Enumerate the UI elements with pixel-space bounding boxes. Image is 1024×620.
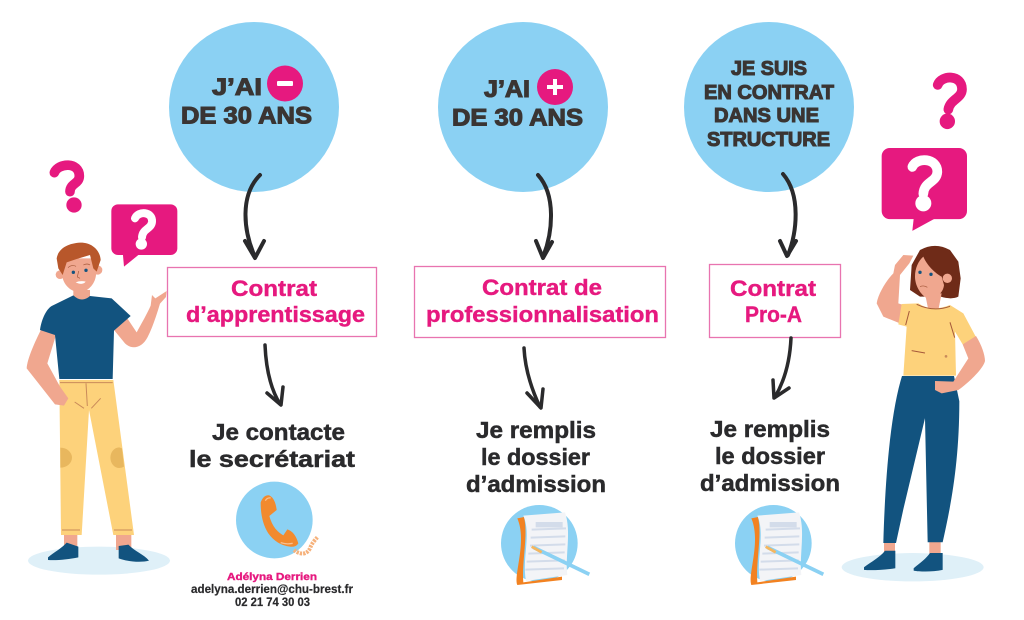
text: je contacte le secrétariat: Je contacte — [212, 419, 345, 445]
panel: circle under 30: J’AI — [212, 74, 262, 101]
icon: man speech bubble — [111, 204, 177, 267]
panel: contrat Pro-A: Pro-A — [745, 302, 802, 327]
panel: contrat de professionnalisation: professionnalisation — [426, 302, 659, 327]
panel: circle over 30 — [438, 22, 608, 192]
text: contact details — [191, 571, 354, 609]
text: je remplis le dossier d'admission (center): d’admission — [466, 471, 606, 497]
icon: woman question mark — [938, 78, 962, 129]
panel: contrat d'apprentissage: Contrat — [231, 276, 318, 301]
panel: circle over 30: J’AI — [484, 76, 530, 103]
text: je remplis le dossier d'admission (right): Je remplis — [710, 416, 830, 442]
panel: circle under contract: EN CONTRAT — [704, 81, 834, 104]
arrow: circle 3 to contract 3 — [780, 174, 796, 256]
text: je remplis le dossier d'admission (center): Je remplis — [476, 417, 596, 443]
arrow: contract 2 to step 2 — [524, 348, 543, 408]
panel: contrat Pro-A — [710, 264, 840, 338]
text: contact details: Adélyna Derrien — [227, 571, 317, 583]
text: je contacte le secrétariat — [189, 419, 355, 472]
panel: circle under contract: STRUCTURE — [707, 128, 830, 151]
arrow: contract 3 to step 3 — [773, 338, 791, 398]
panel: circle under 30 — [169, 22, 339, 192]
illustration: man — [27, 243, 170, 575]
text: je remplis le dossier d'admission (center) — [466, 417, 606, 497]
text: je remplis le dossier d'admission (center): le dossier — [481, 444, 590, 470]
panel: contrat de professionnalisation — [414, 266, 666, 338]
icon: document right — [735, 505, 823, 585]
text: je remplis le dossier d'admission (right): d’admission — [700, 470, 840, 496]
panel: circle under contract: DANS UNE — [714, 104, 819, 127]
panel: circle under contract: JE SUIS — [731, 57, 807, 80]
text: je remplis le dossier d'admission (right): le dossier — [715, 443, 825, 469]
panel: contrat Pro-A: Contrat — [730, 276, 817, 301]
panel: circle under contract — [684, 22, 854, 192]
text: contact details: 02 21 74 30 03 — [235, 597, 310, 609]
panel: circle over 30: DE 30 ANS — [452, 104, 583, 132]
text: je contacte le secrétariat: le secrétariat — [189, 446, 355, 472]
icon: woman speech bubble — [882, 148, 967, 231]
arrow: circle 2 to contract 2 — [536, 175, 552, 258]
icon: man question mark — [54, 165, 82, 213]
arrow: contract 1 to step 1 — [265, 345, 283, 405]
text: je remplis le dossier d'admission (right) — [700, 416, 840, 496]
panel: circle under 30: DE 30 ANS — [181, 102, 312, 130]
panel: contrat d'apprentissage: d’apprentissage — [186, 302, 365, 327]
arrow: circle 1 to contract 1 — [245, 175, 264, 258]
panel: contrat d'apprentissage — [168, 268, 376, 336]
text: contact details: adelyna.derrien@chu-brest.fr — [191, 584, 354, 596]
panel: contrat de professionnalisation: Contrat de — [482, 275, 602, 300]
icon: telephone — [236, 482, 317, 558]
icon: document center — [501, 505, 589, 585]
illustration: woman — [842, 246, 985, 581]
